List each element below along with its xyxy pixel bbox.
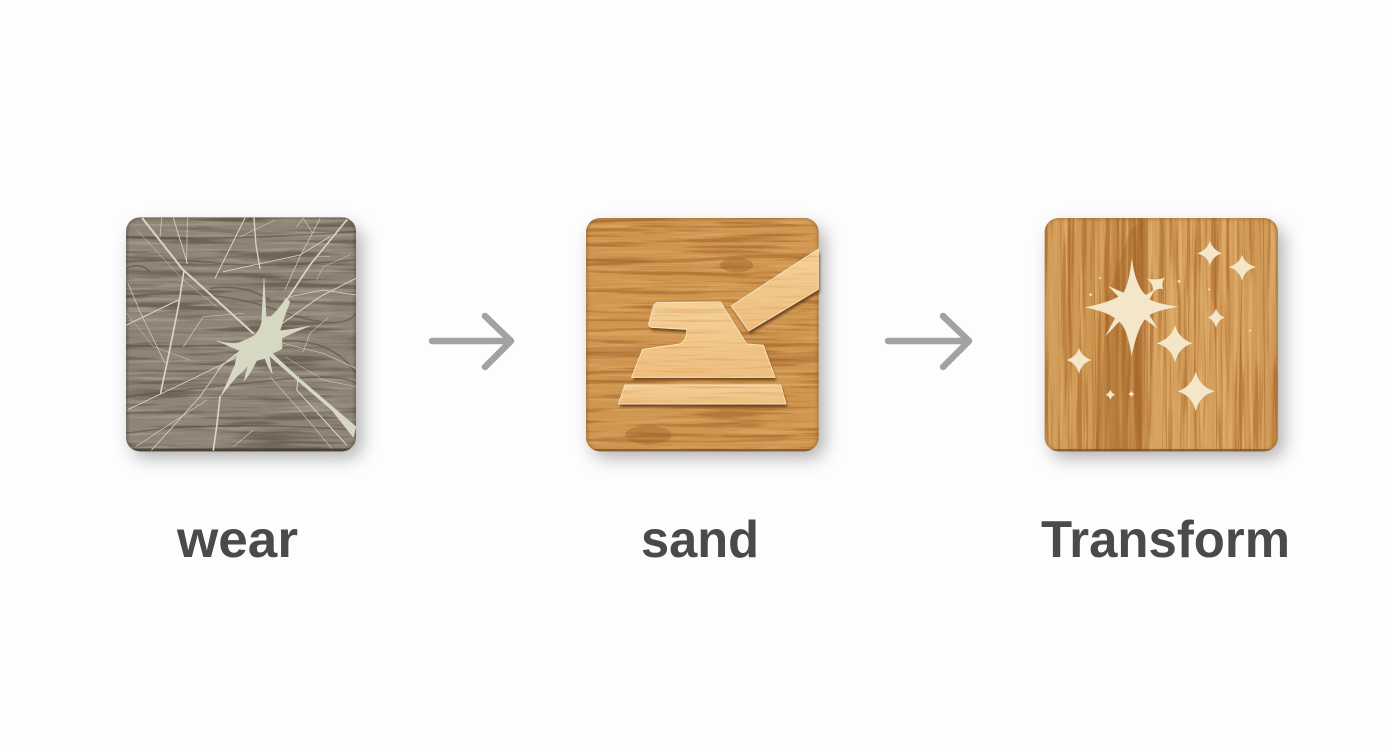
icon: crack impact splat bbox=[217, 278, 356, 437]
sander handle bbox=[731, 249, 818, 331]
icon: sander bbox=[617, 247, 820, 407]
sander wood grain bbox=[617, 247, 820, 407]
icon: sparkles bbox=[1067, 241, 1256, 411]
panel: Transform tile bbox=[1045, 218, 1284, 458]
large sparkle bbox=[1085, 258, 1178, 356]
panel: sand tile bbox=[586, 218, 825, 458]
arrow: wear to sand bbox=[432, 316, 511, 367]
cracks bbox=[127, 218, 356, 450]
arrow: sand to Transform bbox=[888, 316, 969, 367]
label: Transform: Transform bbox=[1041, 511, 1290, 569]
panel: wear tile bbox=[126, 217, 362, 458]
label: wear: wear bbox=[176, 511, 298, 569]
sander body bbox=[632, 302, 775, 377]
label: sand: sand bbox=[641, 511, 759, 569]
sander base plate bbox=[618, 385, 786, 404]
